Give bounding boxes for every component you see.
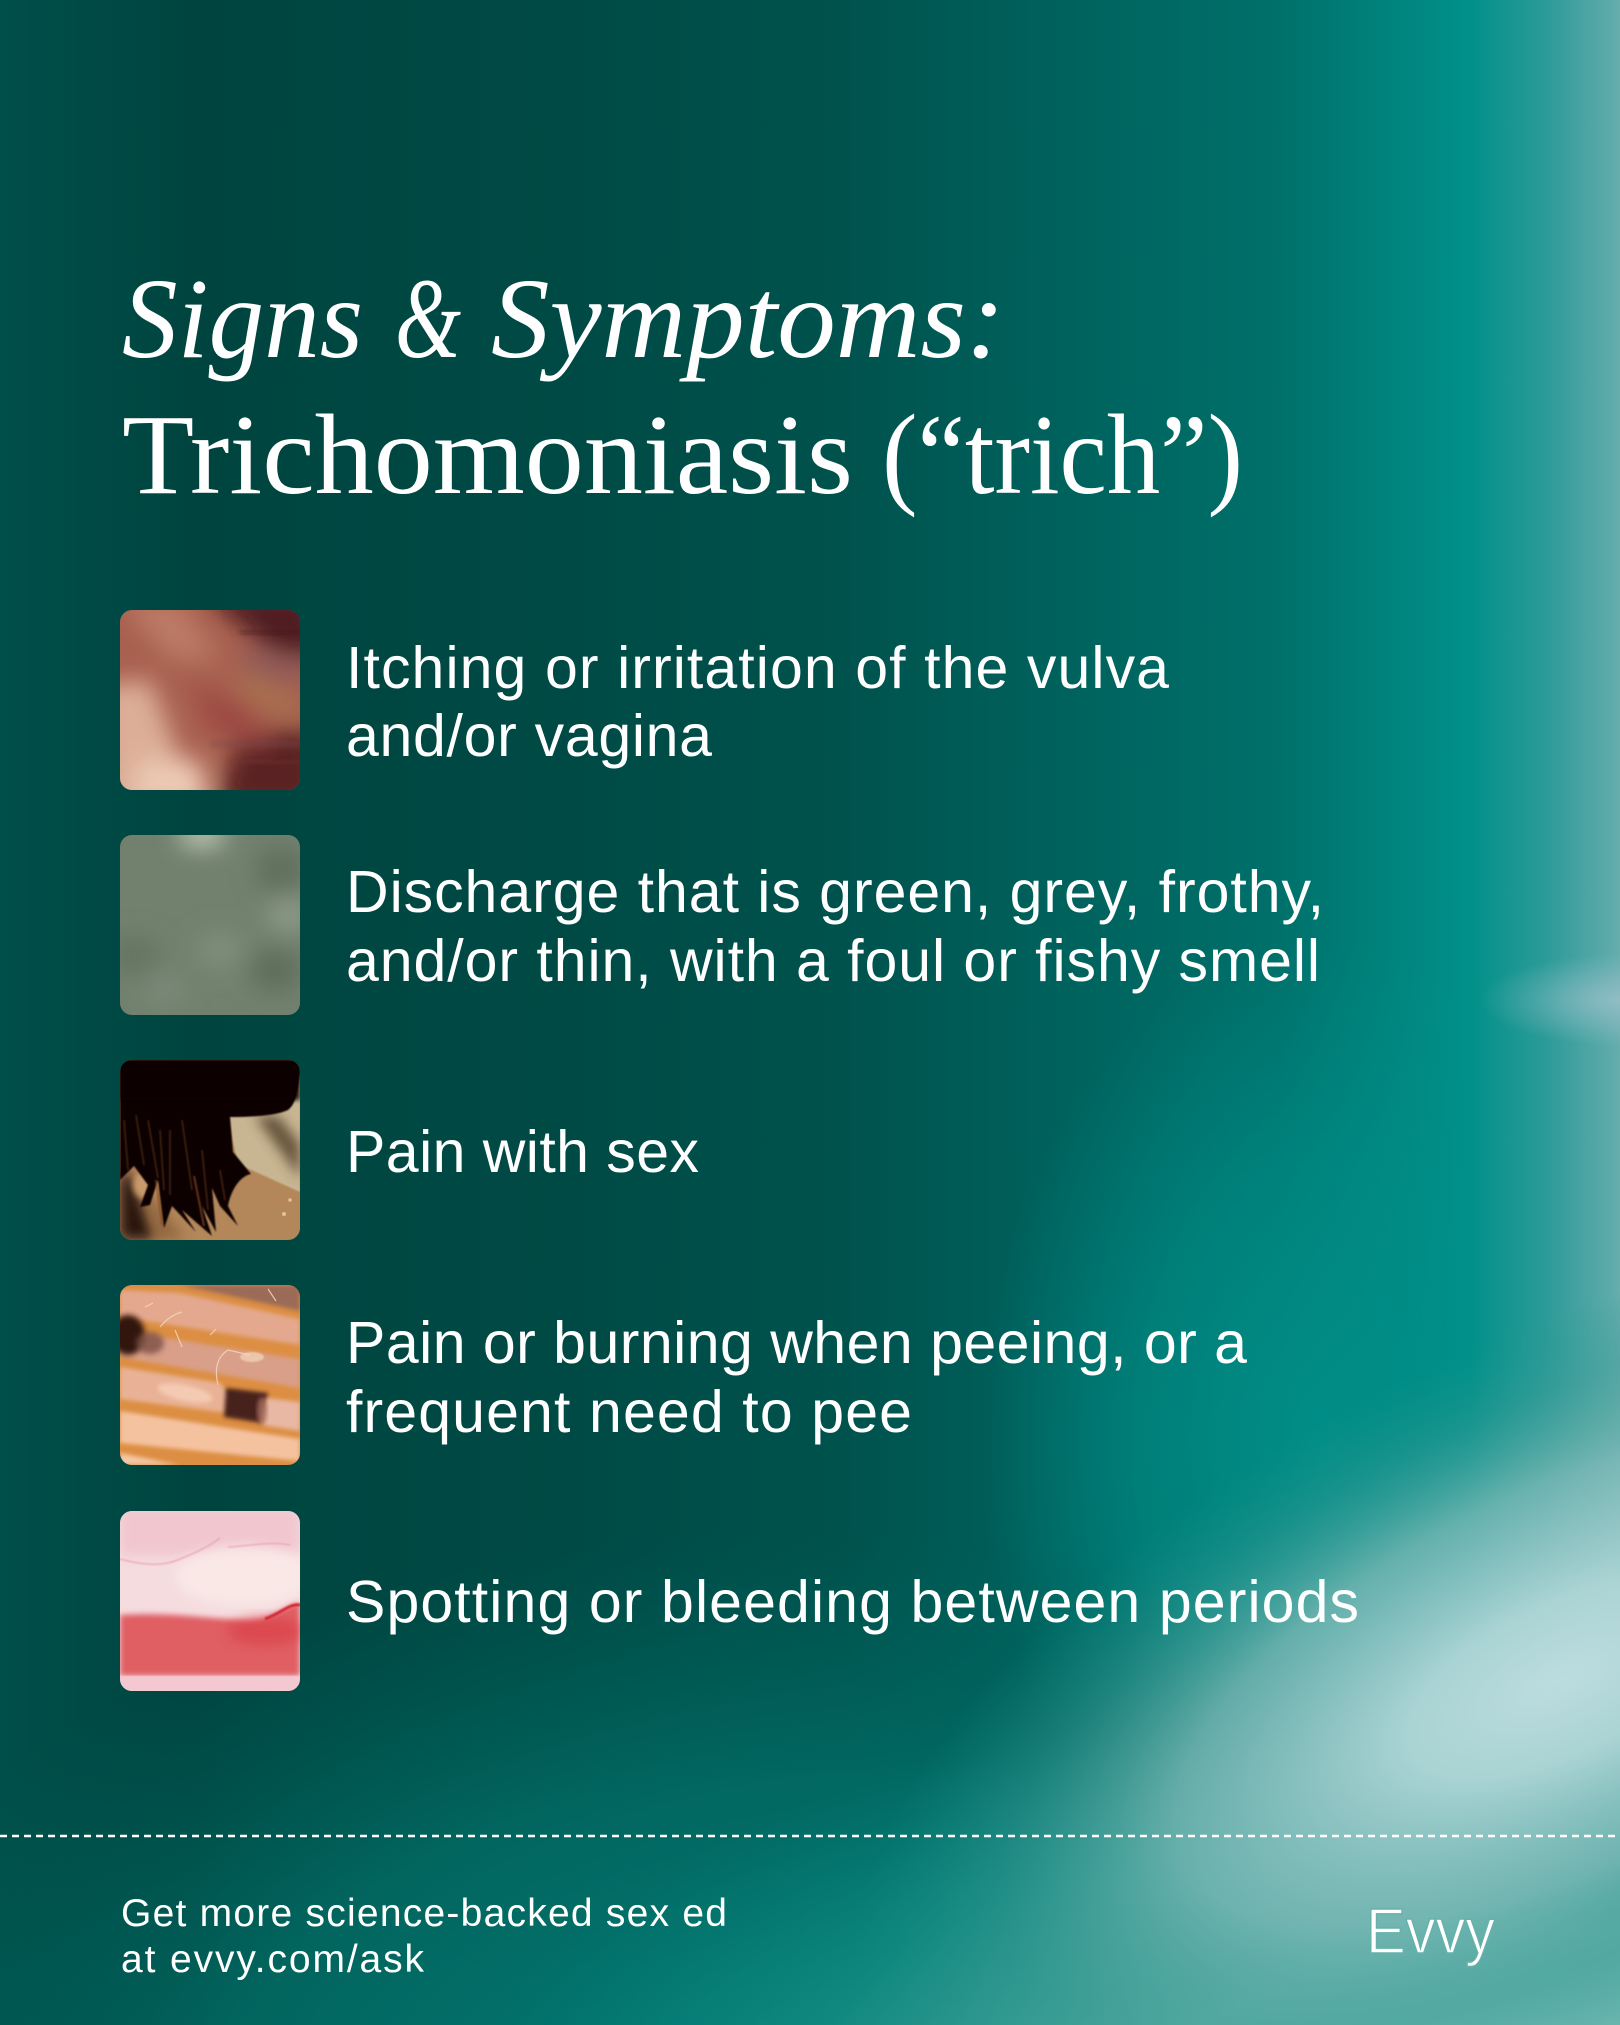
symptom row 1: itching [120, 610, 1169, 790]
symptom text 2: and/or thin, with a foul or fishy smell [346, 928, 1320, 994]
title line 1: Symptoms: [491, 255, 1005, 382]
symptom row 4: burning [111, 1285, 1247, 1465]
title line 2: (“trich”) [882, 391, 1243, 518]
symptom text 4: Pain or burning when peeing, or a [346, 1310, 1247, 1376]
dotted divider [0, 1835, 1620, 1837]
symptom text 3: Pain with sex [346, 1119, 699, 1185]
footer call to action [121, 1892, 727, 1981]
footer call to action: at evvy.com/ask [121, 1938, 424, 1981]
thumbnail: pink and red watercolor [120, 1511, 300, 1691]
symptom text 2: Discharge that is green, grey, frothy, [346, 859, 1324, 925]
title line 1: Signs [122, 255, 363, 382]
thumbnail: peach stripes [120, 1285, 300, 1465]
title line 2: Trichomoniasis [122, 391, 853, 518]
symptom text 4: frequent need to pee [346, 1379, 912, 1445]
logo: Evvy: Evvy [1366, 1895, 1495, 1967]
thumbnail: grey-green texture [120, 835, 300, 1015]
symptom row 5: spotting [120, 1506, 1359, 1691]
symptom text 5: Spotting or bleeding between periods [346, 1569, 1359, 1635]
symptom row 2: discharge [111, 823, 1324, 1015]
symptom row 3: pain with sex [120, 1060, 699, 1240]
footer call to action: Get more science-backed sex ed [121, 1892, 727, 1935]
thumbnail: blurred rust tones [120, 610, 300, 790]
symptom text 1: Itching or irritation of the vulva [346, 635, 1169, 701]
symptom text 4 [346, 1310, 1247, 1445]
neck and wall patch [228, 1072, 300, 1192]
symptom text 2 [346, 859, 1324, 994]
title line 2 [122, 391, 1243, 518]
symptom text 1 [346, 635, 1169, 769]
title [122, 255, 1243, 518]
symptom text 1: and/or vagina [346, 703, 712, 769]
title line 1: & [395, 255, 461, 382]
thumbnail: shoulder and dark hair [120, 1060, 300, 1240]
title line 1 [122, 255, 1005, 382]
